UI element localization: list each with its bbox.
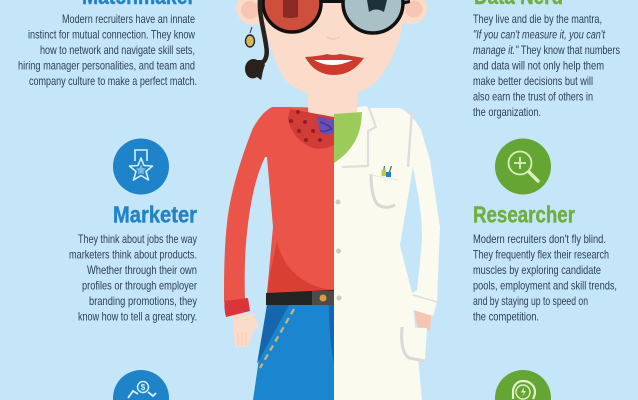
- nose: [327, 37, 340, 39]
- text block: matchmaker description: how to network and navigate skill sets,: [40, 43, 195, 57]
- left hand: [232, 314, 259, 347]
- text block: matchmaker description: hiring manager personalities, and team and: [18, 58, 195, 72]
- text block: data nerd description: [473, 12, 620, 119]
- heading: researcher: Researcher: [473, 202, 575, 228]
- green shirt: [334, 112, 362, 163]
- lips: [305, 54, 364, 75]
- text block: matchmaker description: instinct for mutual connection. They know: [28, 28, 195, 42]
- hair strand: [260, 0, 267, 63]
- text block: researcher description: muscles by exploring candidate: [473, 263, 601, 277]
- text block: data nerd description: the organization.: [473, 105, 541, 119]
- hair curl: [245, 59, 265, 80]
- icon: medal star: [113, 138, 169, 194]
- ears: [236, 0, 427, 25]
- text block: marketer description: know how to tell a great story.: [78, 310, 197, 324]
- text block: researcher description: the competition.: [473, 310, 539, 324]
- icon: dollar network: [113, 370, 169, 400]
- lab coat: [334, 108, 440, 400]
- illustration: half marketer half scientist recruiter: [224, 0, 440, 400]
- text block: marketer description: profiles or through employer: [82, 278, 197, 292]
- heading: marketer: Marketer: [113, 202, 197, 228]
- face: [260, 0, 405, 98]
- text block: data nerd description: make better decisions but will: [473, 74, 593, 88]
- panel: marketer: [69, 138, 197, 324]
- panel: matchmaker: [18, 0, 197, 88]
- text block: data nerd description: and data will not only help them: [473, 58, 604, 72]
- text block: matchmaker description: company culture to make a perfect match.: [29, 74, 197, 88]
- text block: matchmaker description: [18, 12, 197, 88]
- panel: researcher: [473, 138, 617, 324]
- text block: marketer description: Whether through their own: [87, 263, 197, 277]
- coat pocket with pens: [371, 166, 398, 207]
- icon: dollar network: $: [141, 383, 146, 392]
- belt: [266, 290, 334, 305]
- glasses: [263, 0, 410, 33]
- text block: researcher description: [473, 232, 617, 324]
- text block: marketer description: branding promotions, they: [89, 294, 197, 308]
- text block: marketer description: marketers think about products.: [69, 248, 197, 262]
- text block: researcher description: and by staying up to speed on: [473, 294, 588, 308]
- panel: data nerd: [473, 0, 620, 119]
- text block: marketer description: They think about jobs the way: [78, 232, 197, 246]
- lower coat pocket: [402, 327, 427, 361]
- right hand: [414, 308, 432, 330]
- text block: matchmaker description: Modern recruiters have an innate: [62, 12, 195, 26]
- coat collar: [339, 106, 376, 167]
- icon: head with lightning bolt: [495, 370, 551, 400]
- text block: marketer description: [69, 232, 197, 324]
- jeans: [253, 304, 334, 400]
- text block: data nerd description: also earn the trust of others in: [473, 90, 593, 104]
- polka dot scarf: [288, 109, 334, 149]
- coat buttons: [336, 200, 342, 300]
- neck: [308, 90, 357, 117]
- earring: [246, 27, 254, 47]
- red sweater: [224, 107, 334, 317]
- icon: magnifying glass: [495, 138, 551, 194]
